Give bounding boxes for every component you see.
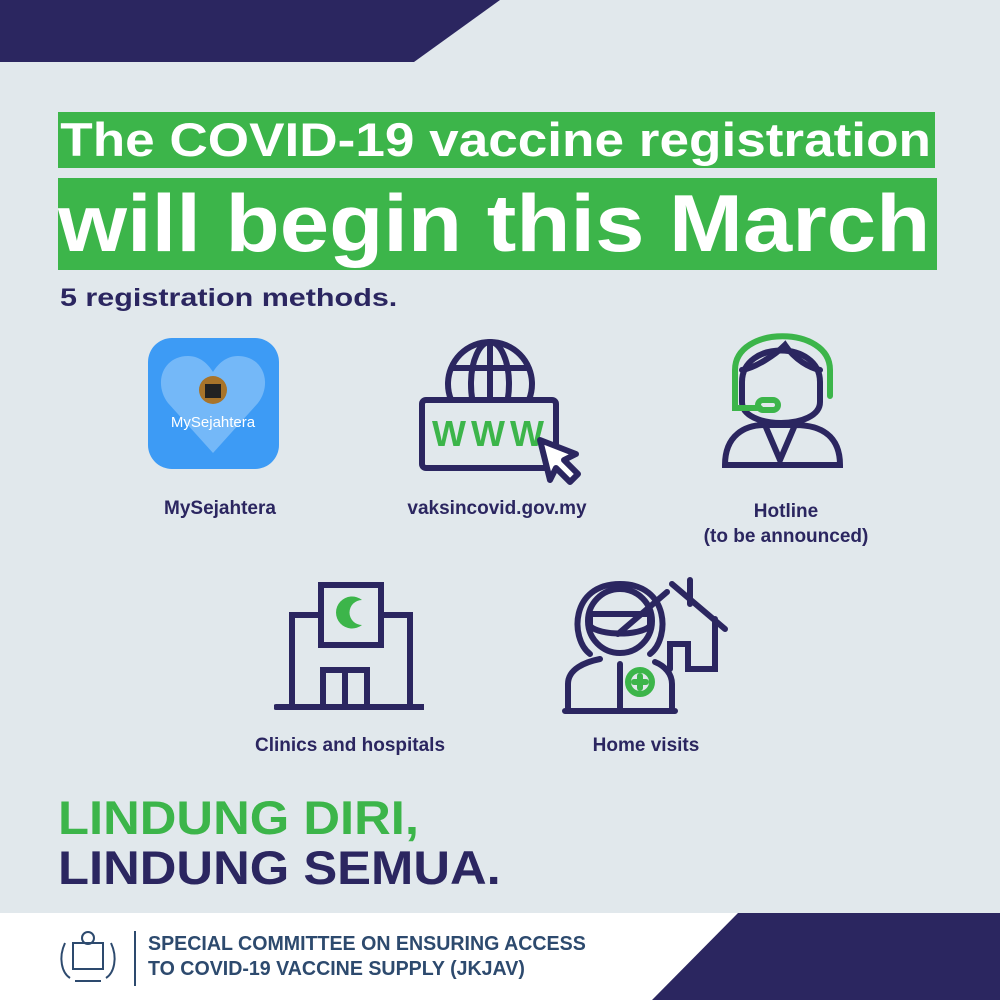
- footer text: SPECIAL COMMITTEE ON ENSURING ACCESS: [148, 933, 586, 955]
- label: hotline: [704, 501, 868, 547]
- icon: www globe: WWW: [432, 413, 549, 454]
- footer text: TO COVID-19 VACCINE SUPPLY (JKJAV): [148, 958, 525, 980]
- icon: home visit: [562, 577, 728, 714]
- label: website: vaksincovid.gov.my: [407, 498, 587, 519]
- footer text: [148, 933, 586, 980]
- icon: MySejahtera app: [148, 338, 279, 469]
- footer: [0, 913, 1000, 1000]
- label: home visits: Home visits: [593, 735, 699, 756]
- top navy shape: [0, 0, 500, 62]
- icon: www globe: [419, 339, 581, 485]
- label: clinics: Clinics and hospitals: [255, 735, 445, 756]
- subtitle: 5 registration methods.: [60, 284, 397, 312]
- slogan: [58, 791, 501, 894]
- label: hotline: Hotline: [754, 501, 818, 522]
- label: hotline: (to be announced): [704, 526, 868, 547]
- title line 2: will begin this March: [58, 179, 930, 269]
- slogan: LINDUNG SEMUA.: [58, 841, 501, 894]
- title line 1: The COVID-19 vaccine registration: [60, 113, 931, 166]
- icon: hotline agent: [722, 333, 843, 468]
- icon: clinic: [274, 582, 424, 710]
- slogan: LINDUNG DIRI,: [58, 791, 419, 844]
- icon: MySejahtera app: MySejahtera: [171, 414, 256, 431]
- label: MySejahtera: MySejahtera: [164, 498, 276, 519]
